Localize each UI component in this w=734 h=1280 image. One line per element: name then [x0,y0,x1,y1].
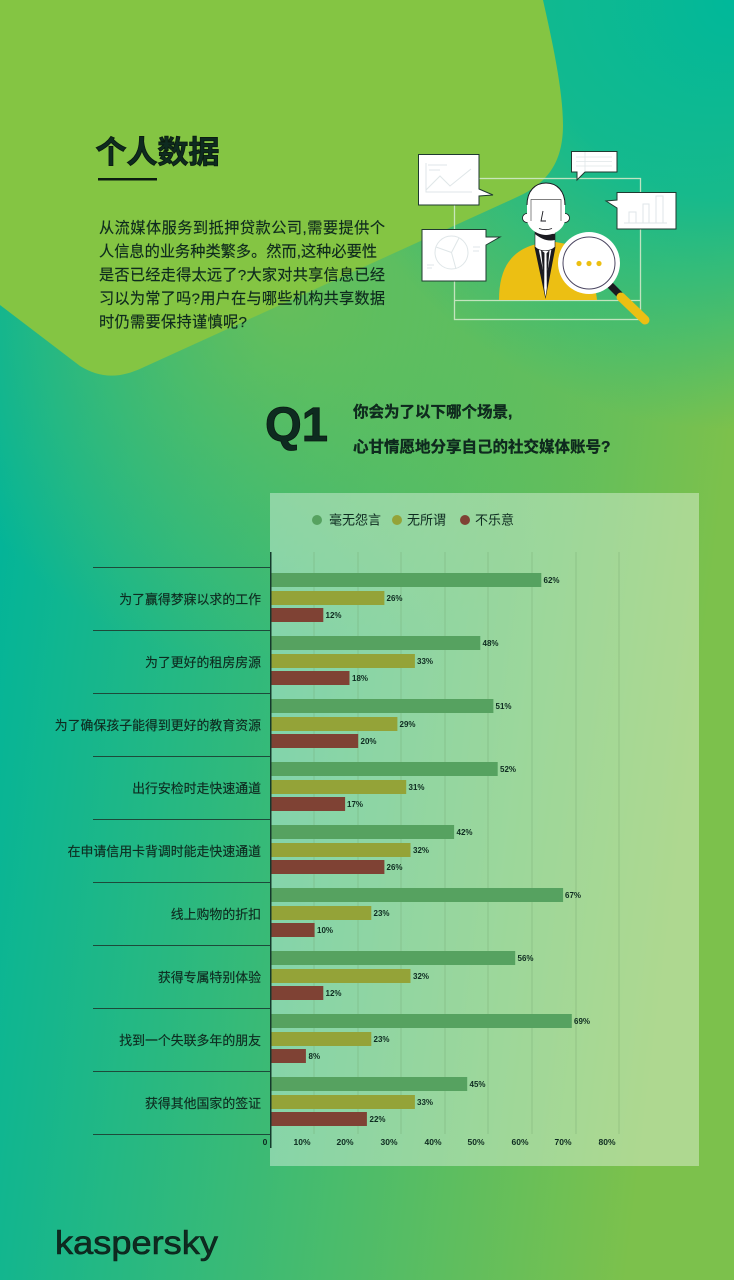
category labels: 为了确保孩子能得到更好的教育资源 [55,718,261,733]
icon: bar chart bubble [606,192,676,229]
green corner shape [0,0,563,376]
category labels: 获得其他国家的签证 [145,1096,261,1111]
axis tick labels: 60% [511,1137,529,1147]
olive bars [271,591,415,1109]
value labels: 18% [352,674,368,683]
value labels: 32% [413,972,429,981]
title: 个人数据 [96,135,220,170]
question text [353,402,610,456]
bar chart [55,552,616,1148]
value labels: 26% [386,594,403,603]
icon: pie chart bubble [422,230,500,281]
value labels: 33% [417,657,433,666]
value labels: 32% [413,846,429,855]
value labels: 12% [326,989,342,998]
legend: 毫无怨言 [329,512,381,528]
value labels: 23% [374,1035,390,1044]
title underline [98,178,157,180]
icon: text bubble [572,152,617,180]
category labels: 为了更好的租房房源 [145,655,261,670]
icon: magnifier [558,232,645,320]
intro paragraph: 是否已经走得太远了?大家对共享信息已经 [99,267,385,284]
category labels: 在申请信用卡背调时能走快速通道 [68,844,261,859]
value labels: 69% [574,1017,590,1026]
value labels: 29% [400,720,416,729]
value labels: 20% [360,737,377,746]
frame [454,178,640,320]
question text: 你会为了以下哪个场景, [353,402,512,421]
question text: 心甘情愿地分享自己的社交媒体账号? [353,437,610,456]
axis tick labels [263,1137,616,1147]
axis tick labels: 20% [336,1137,354,1147]
axis line [270,552,272,1148]
axis tick labels: 70% [554,1137,572,1147]
category labels [55,592,261,1111]
value labels [308,576,590,1124]
Q1 marker: Q1 [265,399,328,452]
legend: 无所谓 [407,512,446,528]
value labels: 62% [544,576,560,585]
intro paragraph: 从流媒体服务到抵押贷款公司,需要提供个 [99,220,385,237]
axis tick labels: 80% [598,1137,616,1147]
category labels: 为了赢得梦寐以求的工作 [119,592,261,607]
value labels: 12% [326,611,342,620]
chart panel [270,493,699,1166]
value labels: 51% [496,702,512,711]
axis tick labels: 40% [424,1137,442,1147]
green bars [271,573,572,1091]
intro paragraph: 习以为常了吗?用户在与哪些机构共享数据 [99,290,385,308]
intro paragraph: 人信息的业务种类繁多。然而,这种必要性 [99,244,377,260]
icon: line chart bubble [418,154,493,205]
value labels: 26% [386,863,403,872]
value labels: 42% [456,828,473,837]
value labels: 45% [470,1080,486,1089]
value labels: 31% [408,783,425,792]
value labels: 23% [374,909,390,918]
category labels: 找到一个失联多年的朋友 [119,1033,261,1048]
icon: neck shadow [535,232,555,241]
value labels: 17% [347,800,363,809]
icon: shirt and tie [534,246,556,299]
value labels: 67% [565,891,581,900]
value labels: 8% [308,1052,320,1061]
value labels: 52% [500,765,516,774]
icon: head [522,183,570,235]
logo: kaspersky: kaspersky [55,1224,219,1261]
illustration: person with magnifier and speech bubbles [418,152,676,320]
legend: 不乐意 [475,512,514,528]
value labels: 48% [482,639,499,648]
value labels: 33% [417,1098,433,1107]
category labels: 线上购物的折扣 [171,907,261,922]
axis tick labels: 30% [380,1137,398,1147]
axis tick labels: 10% [293,1137,311,1147]
legend [312,512,514,528]
axis tick labels: 0 [263,1137,268,1147]
icon: neck [535,230,555,251]
value labels: 56% [518,954,534,963]
axis tick labels: 50% [467,1137,485,1147]
icon: yellow jacket [499,241,597,300]
value labels: 22% [370,1115,386,1124]
value labels: 10% [317,926,333,935]
category labels: 出行安检时走快速通道 [132,781,261,796]
intro paragraph: 时仍需要保持谨慎呢? [99,313,247,331]
red bars [271,608,384,1126]
category labels: 获得专属特别体验 [158,970,261,985]
intro paragraph [99,220,385,331]
